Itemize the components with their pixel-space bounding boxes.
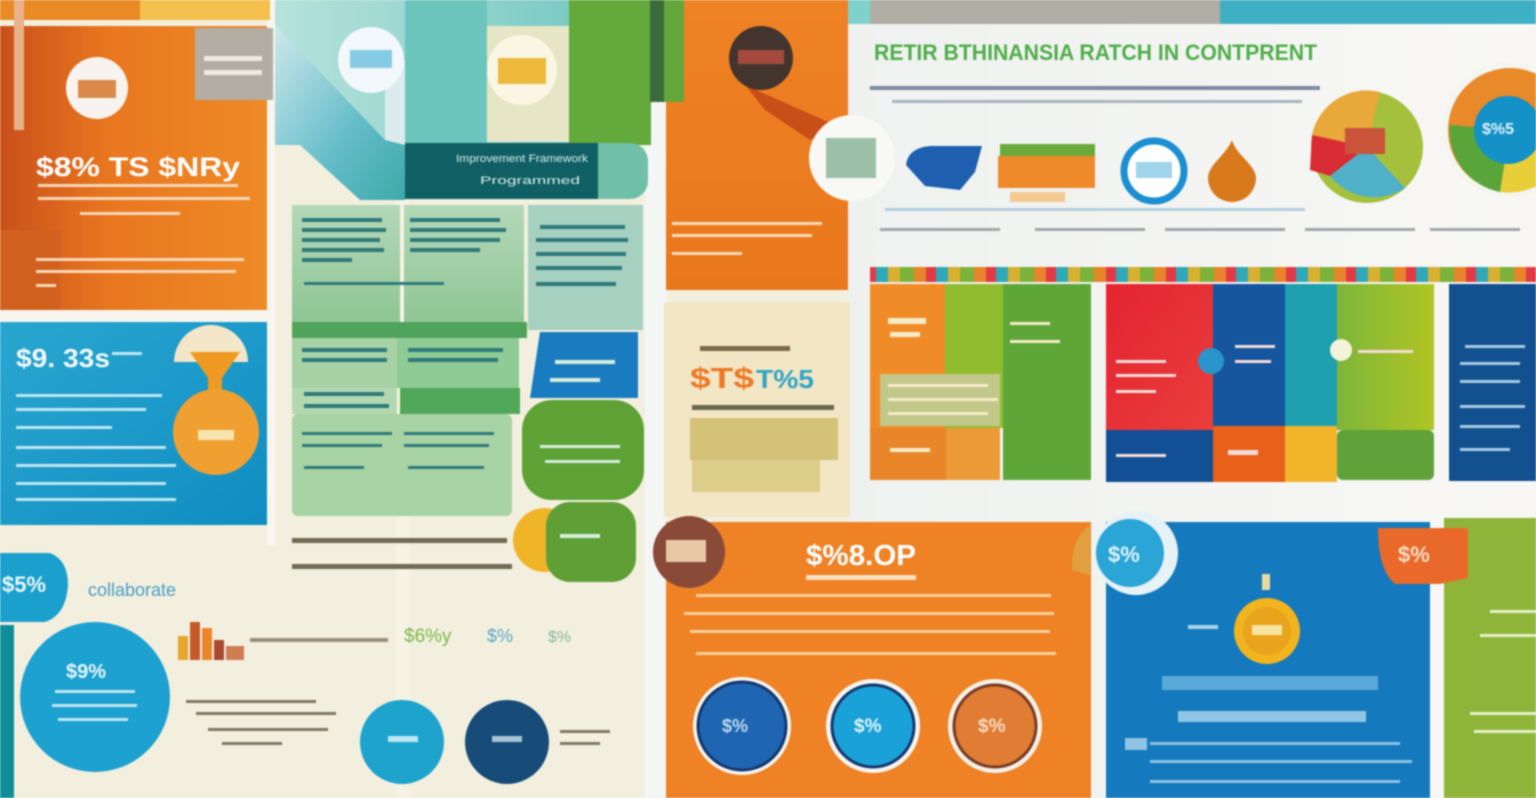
icon: ring: [1124, 141, 1184, 201]
ring: blue: $%: [722, 716, 748, 736]
ring: orange: [948, 679, 1042, 773]
panel: bottom-left: $%: [548, 629, 571, 646]
color strip: [870, 267, 1536, 282]
ring: blue: [693, 677, 791, 775]
panel: top-right header: [848, 0, 1536, 231]
chart icon: [178, 622, 244, 660]
heading: $8% TS $NRy: [36, 152, 240, 182]
icon: blue cloud map: [906, 146, 982, 190]
grey tag: [195, 28, 273, 100]
panel: orange bottom: $%8.OP: [806, 540, 916, 572]
icon: coin: [1234, 574, 1300, 664]
ring: orange: $%: [978, 716, 1006, 737]
panel: orange bottom: [653, 516, 1091, 798]
panel: colored columns left: [870, 284, 1091, 480]
panel: cream centre: $T$: [690, 363, 754, 395]
panel: blue bottom: $%: [1398, 542, 1430, 567]
panel: cream centre: T%5: [756, 364, 814, 394]
icon: orange block: [998, 144, 1095, 202]
panel: blue left: [0, 322, 267, 525]
panel: top-right header: RETIR BTHINANSIA RATCH IN CONTPRENT: [874, 40, 1318, 65]
icon: white badge: [338, 27, 404, 93]
panel: green table: [292, 205, 643, 569]
panel: bottom-left: $%: [487, 626, 513, 646]
panel: blue left: $9. 33s: [16, 343, 110, 373]
panel: top centre teal: [275, 0, 651, 200]
panel: right stack of pills: [513, 332, 644, 582]
icon: drop: [1208, 140, 1256, 202]
panel: bottom-left: [0, 553, 610, 798]
panel: blue bottom: $%: [1108, 542, 1140, 567]
panel: cream centre: [664, 302, 850, 517]
panel: dark teal title: Programmed: [480, 175, 580, 187]
icon: yellow badge: [487, 35, 557, 105]
icon: badge: [66, 57, 128, 119]
text lines under table: [292, 538, 512, 569]
ring: cyan: [826, 679, 920, 773]
panel: blue bottom: [1094, 511, 1468, 798]
panel: orange centre top: [650, 0, 895, 290]
donut chart: [1442, 62, 1536, 198]
panel: green bottom right: [1444, 518, 1536, 798]
pie chart: [1310, 90, 1423, 203]
panel: bottom-left: $6%y: [404, 626, 452, 647]
panel: top-left orange: [0, 0, 273, 310]
circle: [20, 622, 170, 772]
panel: navy column: [1449, 284, 1536, 481]
circle: $9%: [66, 661, 106, 683]
panel: bottom-left: $5%: [2, 572, 46, 597]
circles: [360, 700, 444, 784]
panel: colored columns right: [1106, 284, 1434, 482]
panel: dark teal title: Improvement Framework: [456, 153, 589, 165]
icon: orange medal: [173, 325, 259, 475]
donut chart: $%5: [1482, 121, 1514, 138]
text lines: [36, 184, 250, 287]
ring: cyan: $%: [854, 716, 882, 737]
panel: dark teal title: [405, 143, 648, 199]
panel: bottom-left: collaborate: [88, 580, 176, 600]
